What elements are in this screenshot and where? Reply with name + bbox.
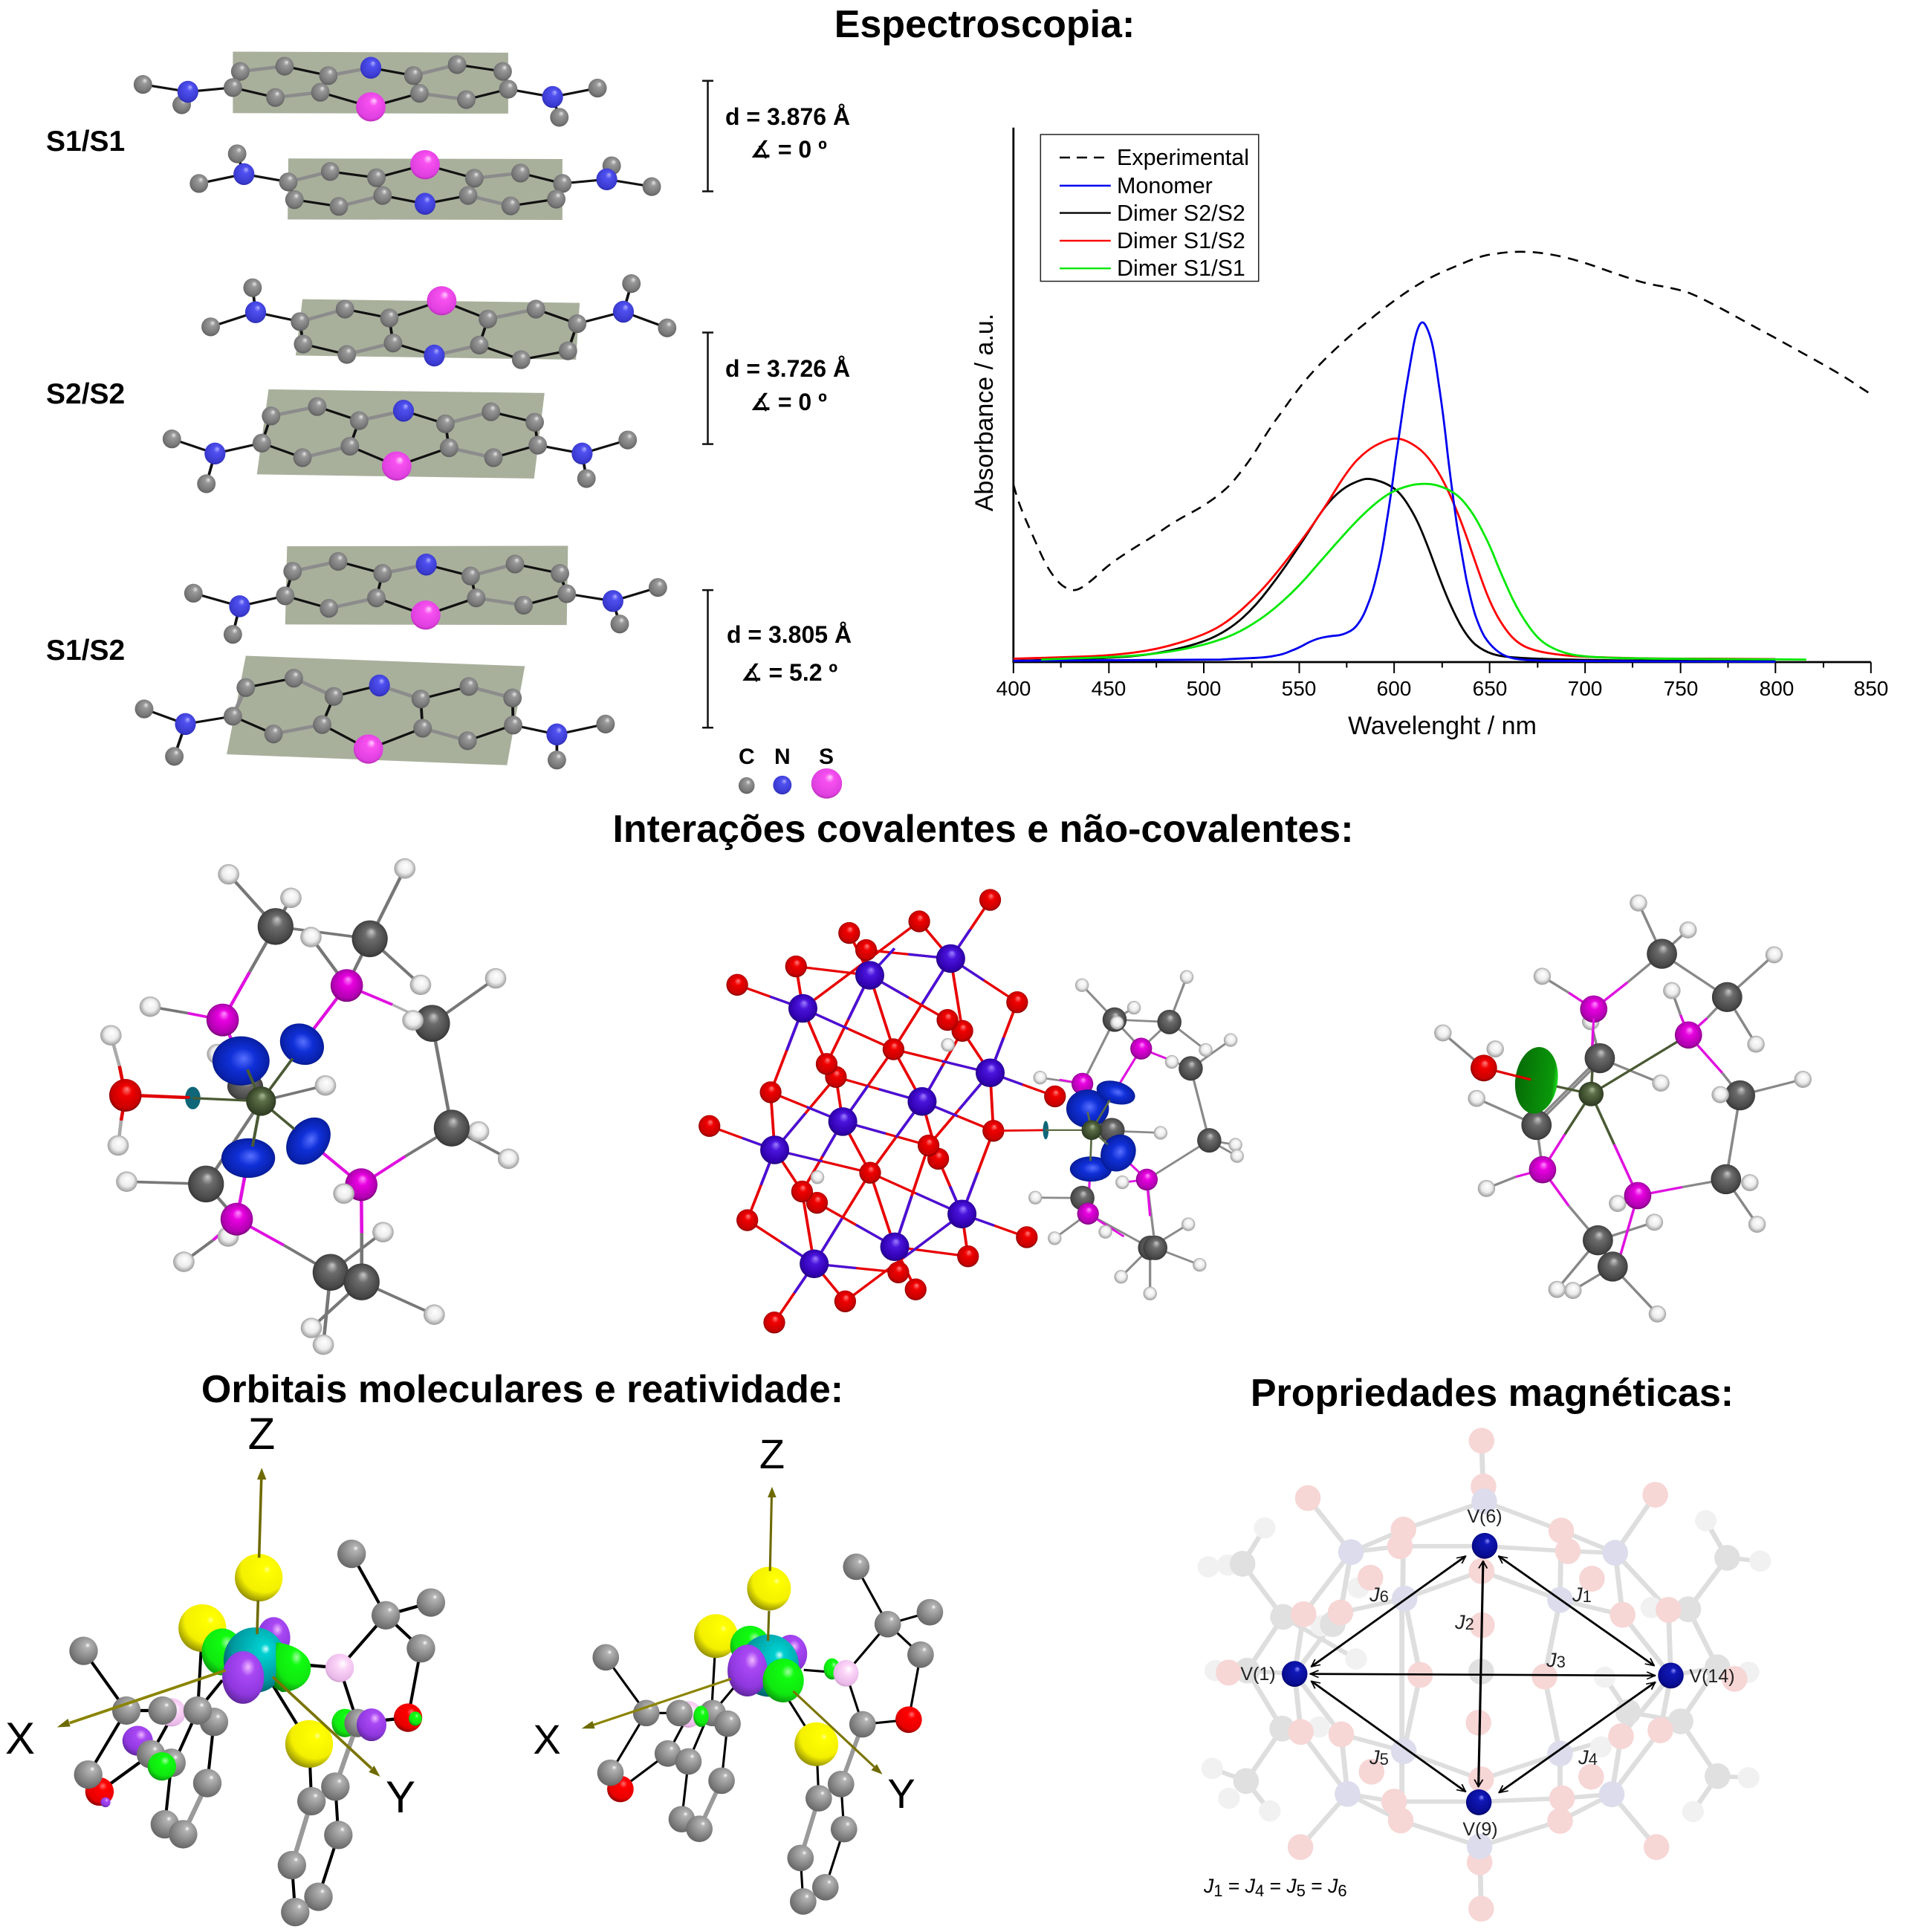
grey bonds <box>126 869 508 1345</box>
grey bonds <box>1443 903 1803 1314</box>
y-axis title: Absorbance / a.u. <box>970 314 999 511</box>
atoms <box>1434 895 1812 1323</box>
labels V sites <box>1240 1506 1735 1840</box>
x-axis tick labels: 700 <box>1568 677 1602 700</box>
molecule S2/S2 top <box>201 274 676 369</box>
molecule S1/S1 bottom <box>189 144 661 220</box>
labels J couplings: J <box>1455 1611 1465 1633</box>
angle text S1/S2: ∡ = 5.2 º <box>741 659 837 686</box>
distance text S2/S2: d = 3.726 Å <box>725 355 850 382</box>
labels J couplings: 4 <box>1589 1750 1598 1769</box>
axis label X: X <box>533 1716 561 1763</box>
axes <box>1014 128 1871 662</box>
x-axis tick labels: 400 <box>996 677 1031 700</box>
panel: covalent molecule with green ellipsoid <box>1434 895 1812 1323</box>
x-axis tick labels: 750 <box>1664 677 1698 700</box>
panel: magnetic exchange diagram <box>1198 1427 1771 1922</box>
exchange arrows <box>1310 1556 1656 1792</box>
magenta bonds <box>1516 982 1722 1257</box>
panel: stacked dimer molecules <box>134 51 842 799</box>
panel: cluster with ligand <box>698 889 1244 1333</box>
x-axis tick labels: 500 <box>1187 677 1221 700</box>
title: Espectroscopia: Espectroscopia: <box>834 3 1135 46</box>
atoms <box>592 1554 943 1915</box>
labels V sites: V(9) <box>1462 1819 1498 1840</box>
x-axis tick labels: 550 <box>1282 677 1316 700</box>
back atoms <box>69 1540 445 1926</box>
labels J couplings: 2 <box>1465 1615 1474 1633</box>
equation J1 = J4 = J5 = J6: 5 <box>1297 1881 1306 1900</box>
cluster bonds <box>710 900 1055 1323</box>
x-axis tick labels <box>996 677 1888 700</box>
labels J couplings: J <box>1369 1583 1380 1606</box>
panel: molecular orbital right <box>582 1487 943 1915</box>
labels V sites: V(6) <box>1467 1506 1503 1527</box>
equation J1 = J4 = J5 = J6: J <box>1286 1875 1297 1897</box>
vanadium centres <box>1282 1533 1684 1815</box>
molecule S1/S2 bottom <box>135 655 615 769</box>
distance text S1/S1: d = 3.876 Å <box>725 103 850 130</box>
ligand atoms <box>1028 970 1244 1300</box>
axis arrows <box>582 1487 883 1774</box>
molecule S2/S2 bottom <box>163 389 637 493</box>
panel: covalent molecule with blue ellipsoids <box>100 858 519 1355</box>
water bonds <box>120 1066 192 1121</box>
legend labels: Dimer S2/S2 <box>1117 201 1245 226</box>
green NCI ellipsoid <box>1511 1045 1561 1115</box>
title: Propriedades: Propriedades magnéticas: <box>1251 1372 1734 1415</box>
x-axis title: Wavelenght / nm <box>1348 712 1537 740</box>
labels V sites: V(14) <box>1689 1666 1735 1687</box>
oxygen atoms and hydrogens <box>698 889 1066 1333</box>
axis arrows <box>57 1468 380 1777</box>
label: S1/S1: S1/S1 <box>46 126 125 158</box>
distance brackets <box>702 81 713 727</box>
equation J1 = J4 = J5 = J6: 4 <box>1255 1881 1264 1900</box>
molecule S1/S2 top <box>184 545 667 644</box>
labels J couplings: 6 <box>1380 1587 1389 1606</box>
axis label Z: Z <box>759 1430 785 1477</box>
title: Orbitais: Orbitais moleculares e reatividade: <box>201 1368 843 1411</box>
x-axis tick labels: 600 <box>1377 677 1411 700</box>
equation J1 = J4 = J5 = J6: 6 <box>1338 1881 1347 1900</box>
labels J couplings: 3 <box>1557 1653 1566 1671</box>
blue NCI ellipsoids <box>185 1019 339 1178</box>
legend letters C N S: S <box>819 745 834 769</box>
distance text S1/S2: d = 3.805 Å <box>727 621 852 648</box>
x-axis tick labels: 650 <box>1473 677 1507 700</box>
central bonds and metal <box>1497 1018 1604 1106</box>
equation J1 = J4 = J5 = J6: J <box>1328 1875 1338 1897</box>
central metal atom <box>246 1086 276 1116</box>
curve: green dimer S1/S1 <box>1041 484 1806 660</box>
framework bonds <box>606 1566 930 1902</box>
molecule S1/S1 top <box>134 51 607 126</box>
label: S2/S2: S2/S2 <box>46 378 125 410</box>
labels J couplings: J <box>1369 1746 1380 1769</box>
legend letters C N S: N <box>774 745 791 769</box>
faded cluster bonds <box>1208 1441 1760 1909</box>
legend letters C N S: C <box>739 745 755 769</box>
labels J couplings: J <box>1546 1649 1557 1671</box>
x-axis tick labels: 800 <box>1760 677 1794 700</box>
axis label Y: Y <box>386 1772 415 1822</box>
ligand ellipsoids <box>1043 1076 1141 1225</box>
metal centre bonds <box>192 1058 294 1147</box>
curve: blue monomer <box>1014 322 1775 661</box>
label: S1/S2: S1/S2 <box>46 635 125 667</box>
equation J1 = J4 = J5 = J6: = <box>1306 1875 1328 1897</box>
vanadium atoms <box>760 944 1005 1278</box>
x-axis tick labels: 450 <box>1092 677 1126 700</box>
curve: red dimer S1/S2 <box>1014 438 1775 659</box>
labels J couplings: J <box>1578 1746 1589 1769</box>
angle text S2/S2: ∡ = 0 º <box>750 389 827 415</box>
magenta bonds <box>188 972 405 1245</box>
legend labels: Experimental <box>1117 145 1249 170</box>
equation J1 = J4 = J5 = J6: J <box>1245 1875 1255 1897</box>
equation J1 = J4 = J5 = J6: = <box>1264 1875 1286 1897</box>
d orbital lobes <box>201 1617 311 1704</box>
labels V sites: V(1) <box>1240 1664 1276 1685</box>
faded atoms <box>1198 1427 1771 1922</box>
equation J1 = J4 = J5 = J6: 1 <box>1213 1881 1223 1900</box>
equation J1 = J4 = J5 = J6: J <box>1204 1875 1213 1897</box>
labels J couplings <box>1369 1583 1598 1769</box>
legend labels: Dimer S1/S1 <box>1117 256 1245 281</box>
curve: black dimer S2/S2 <box>1014 479 1775 661</box>
legend labels <box>1117 145 1249 281</box>
labels J couplings: 1 <box>1583 1587 1592 1606</box>
framework bonds <box>83 1554 431 1912</box>
curve: experimental <box>1014 252 1871 590</box>
chart: absorbance spectra <box>970 128 1888 740</box>
axis label Y: Y <box>887 1770 915 1817</box>
atom legend spheres <box>739 768 842 799</box>
labels J couplings: 5 <box>1380 1750 1389 1769</box>
equation J1 = J4 = J5 = J6: = <box>1223 1875 1245 1897</box>
x-axis tick labels: 850 <box>1854 677 1888 700</box>
d orbital lobes <box>727 1626 807 1702</box>
atoms <box>100 858 519 1355</box>
legend labels: Monomer <box>1117 173 1213 198</box>
axis label X: X <box>5 1714 35 1763</box>
legend labels: Dimer S1/S2 <box>1117 228 1245 253</box>
axis label Z: Z <box>248 1409 275 1459</box>
ligand bonds <box>1035 977 1237 1294</box>
angle text S1/S1: ∡ = 0 º <box>750 136 827 163</box>
panel: molecular orbital left <box>57 1468 445 1926</box>
legend box <box>1040 134 1259 281</box>
labels J couplings: J <box>1572 1583 1583 1606</box>
title: Interações: Interações covalentes e não-covalentes: <box>612 808 1354 851</box>
